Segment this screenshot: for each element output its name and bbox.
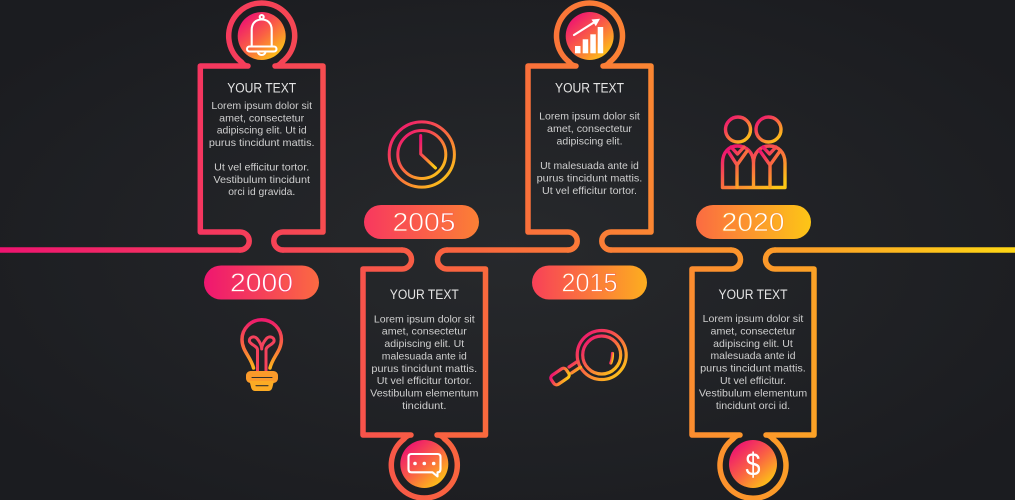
body text: orci id gravida.: [228, 186, 295, 198]
body text: Lorem ipsum dolor sit: [703, 313, 803, 325]
body text: malesuada ante id: [382, 350, 467, 362]
year pill 2020: 2020: [722, 207, 784, 237]
icon: light bulb: [242, 320, 281, 391]
body text: Ut vel efficitur.: [720, 375, 786, 387]
panel outline with top circle: [528, 3, 651, 250]
body text: adipiscing elit.: [556, 136, 622, 148]
body text: Ut vel efficitur tortor.: [214, 162, 309, 174]
icon: clock: [389, 122, 454, 187]
heading: YOUR TEXT: [390, 287, 459, 302]
body text: purus tincidunt mattis.: [371, 363, 477, 375]
body text: [209, 100, 315, 198]
icon: dollar sign: $: [746, 446, 761, 482]
year pill 2015: [532, 266, 647, 300]
heading: YOUR TEXT: [718, 287, 788, 302]
icon: magnifying glass: [549, 330, 626, 386]
body text: adipiscing elit. Ut id: [217, 125, 307, 137]
body text: [699, 313, 807, 412]
icon: bell: [238, 12, 286, 60]
body text: Lorem ipsum dolor sit: [211, 100, 312, 112]
year pill 2000: [204, 266, 319, 300]
year pill 2015: 2015: [562, 268, 618, 298]
panel outline with bottom circle: [363, 250, 486, 498]
body text: amet, consectetur: [382, 326, 467, 338]
body text: tincidunt orci id.: [716, 400, 790, 412]
body text: adipiscing elit. Ut: [384, 338, 464, 350]
icon: two people: [722, 117, 785, 188]
body text: tincidunt.: [402, 400, 446, 412]
panel outline with bottom circle: [692, 250, 814, 498]
icon: rising bar chart: [566, 12, 614, 60]
body text: purus tincidunt mattis.: [537, 172, 642, 184]
panel: milestone 2015 text box: [528, 3, 651, 250]
year pill 2005: [364, 205, 479, 239]
body text: malesuada ante id: [710, 350, 796, 362]
year pill 2020: [696, 205, 811, 239]
timeline line: [0, 247, 1015, 253]
body text: [370, 313, 479, 412]
body text: amet, consectetur: [710, 325, 796, 337]
body text: amet, consectetur: [547, 123, 633, 135]
heading: YOUR TEXT: [555, 80, 624, 96]
panel: milestone 2000 text box: [200, 3, 323, 250]
year pill 2005: 2005: [392, 207, 456, 237]
body text: amet, consectetur: [219, 112, 305, 124]
icon: dollar sign: [729, 440, 777, 488]
panel: milestone 2020 text box: [692, 250, 814, 498]
body text: Lorem ipsum dolor sit: [374, 313, 475, 325]
body text: Ut vel efficitur tortor.: [377, 375, 472, 387]
icon: chat bubble: [400, 440, 448, 488]
year pill 2000: 2000: [230, 268, 293, 298]
body text: purus tincidunt mattis.: [209, 137, 315, 149]
panel outline with top circle: [200, 3, 323, 250]
body text: Vestibulum elementum: [699, 387, 807, 399]
body text: purus tincidunt mattis.: [700, 363, 806, 375]
body text: adipiscing elit. Ut: [713, 338, 793, 350]
body text: Ut vel efficitur tortor.: [542, 185, 637, 197]
panel: milestone 2005 text box: [363, 250, 486, 498]
heading: YOUR TEXT: [227, 80, 296, 96]
body text: Lorem ipsum dolor sit: [539, 111, 640, 123]
body text: Vestibulum tincidunt: [213, 174, 310, 186]
body text: Vestibulum elementum: [370, 388, 479, 400]
body text: Ut malesuada ante id: [540, 160, 639, 172]
body text: [537, 111, 642, 197]
